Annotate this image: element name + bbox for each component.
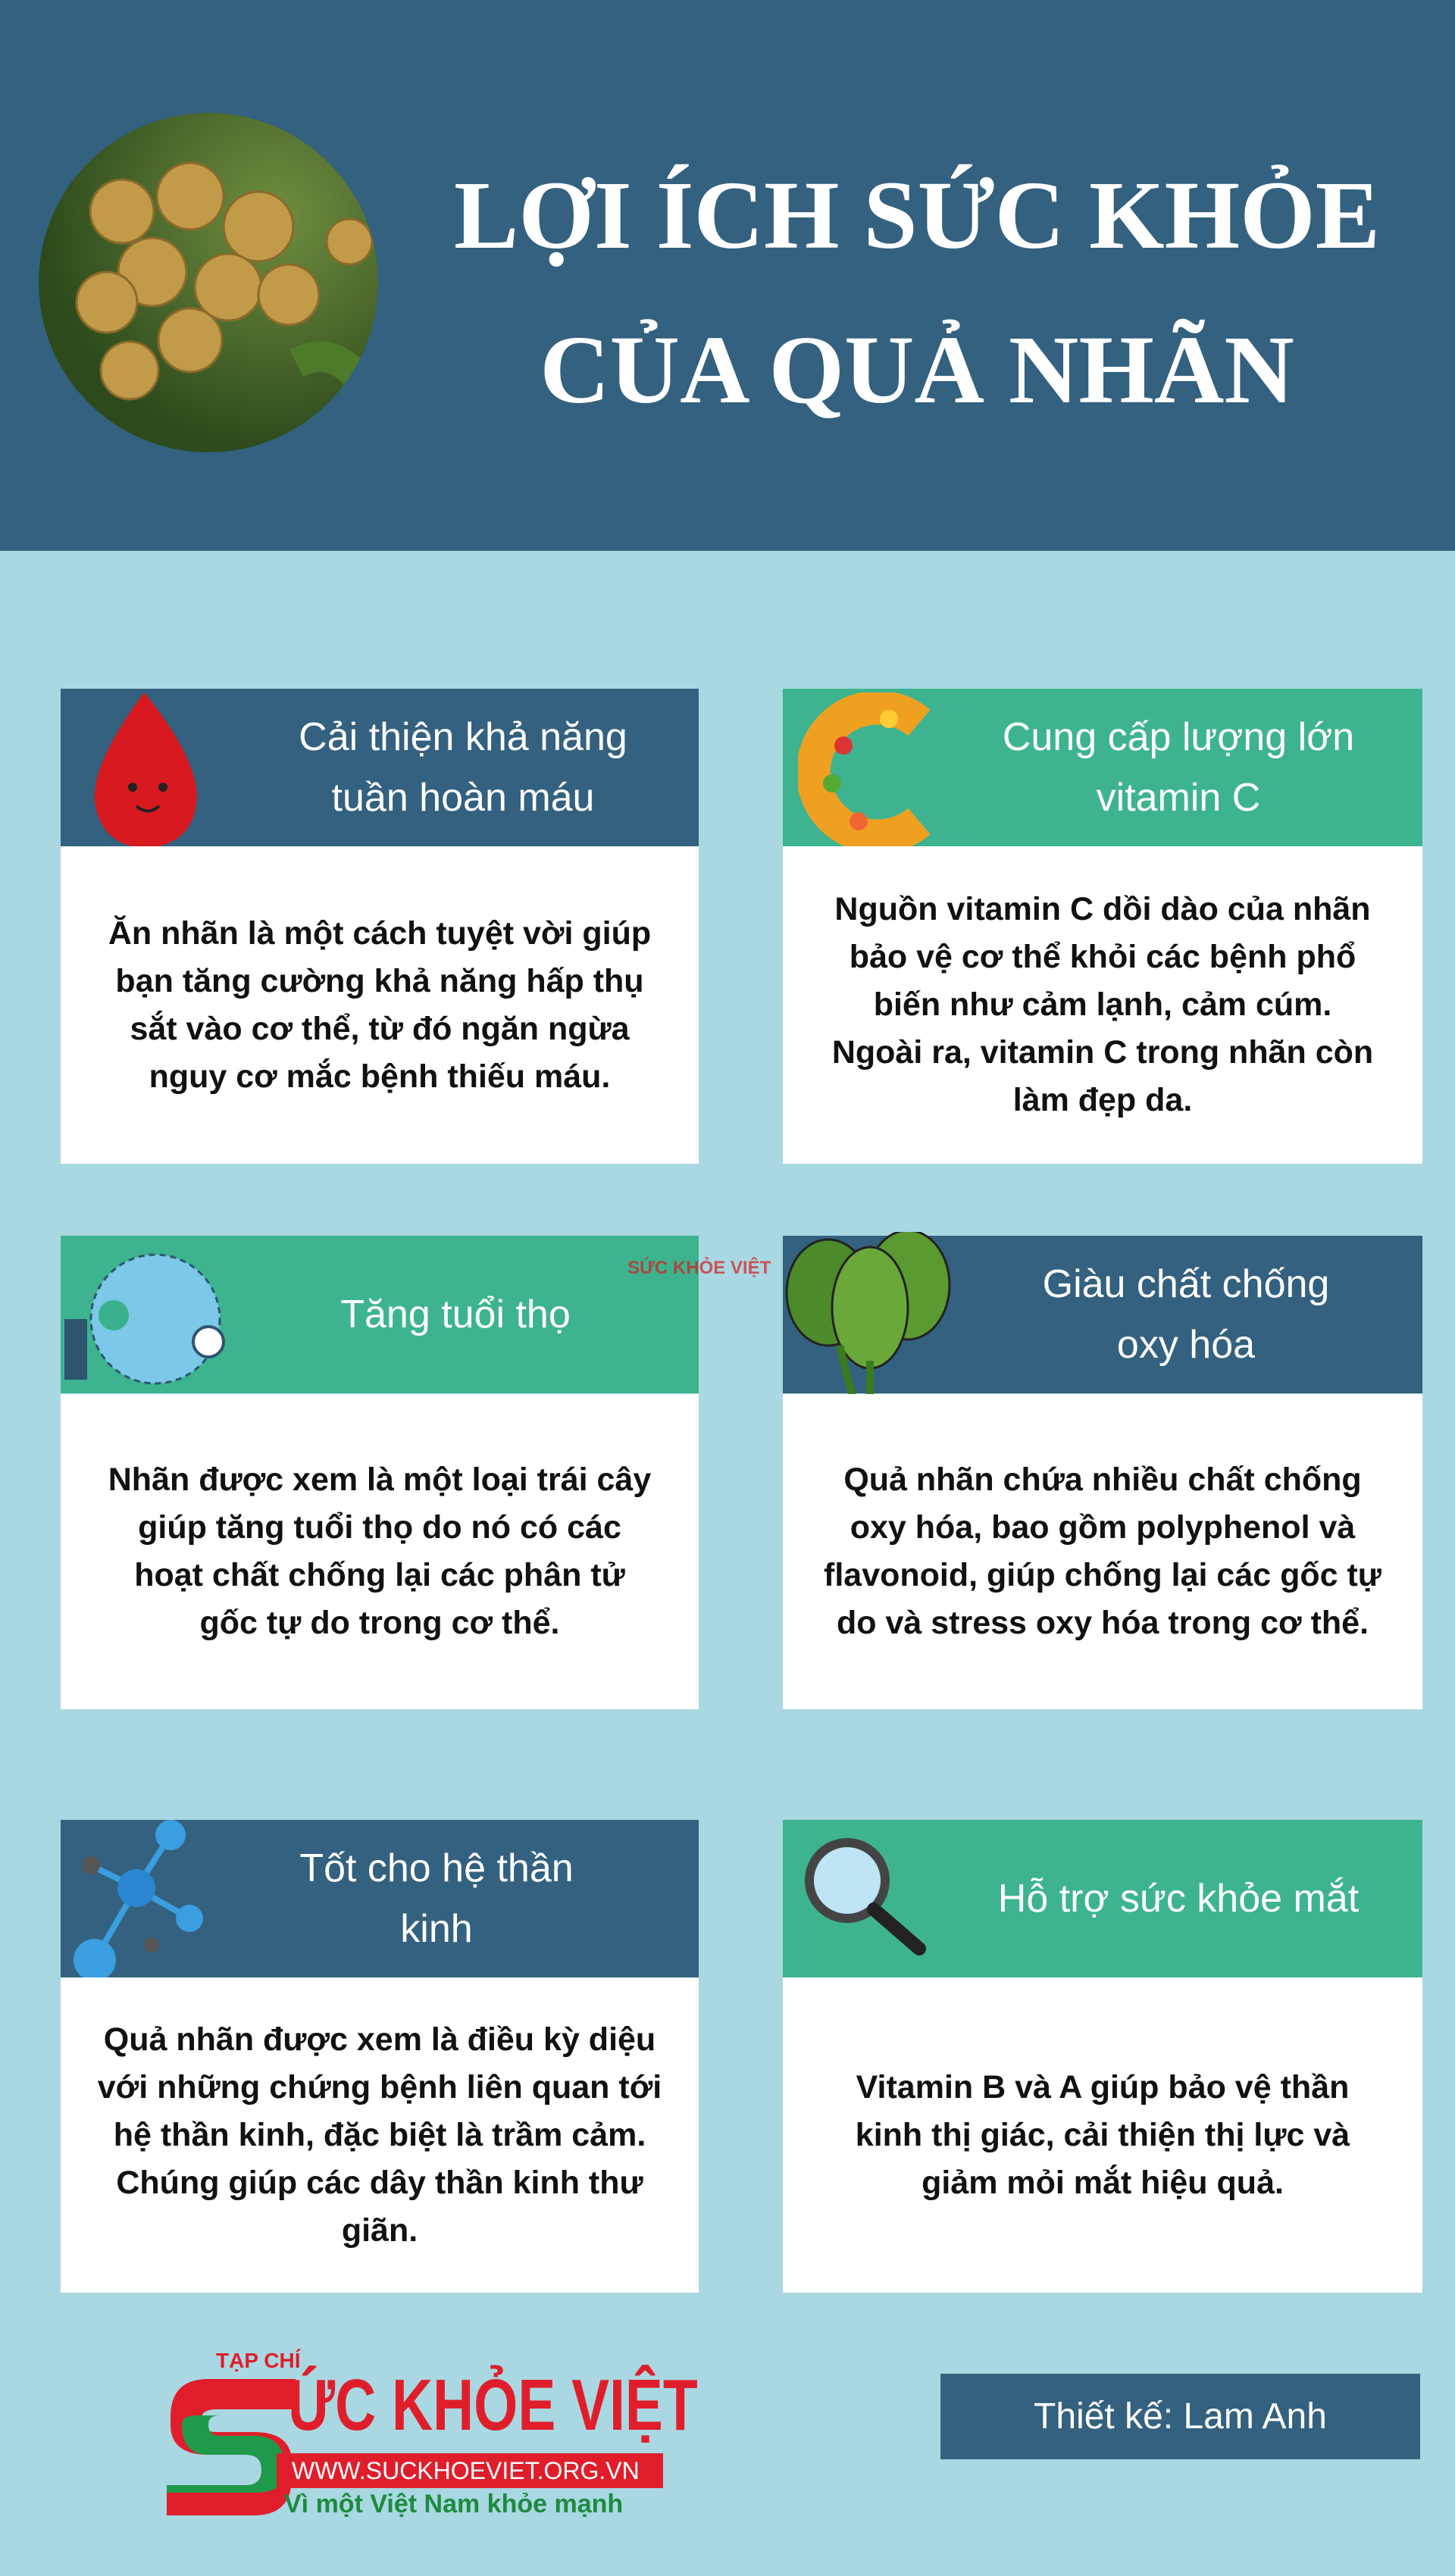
text	[783, 1977, 1422, 2293]
text	[783, 1394, 1422, 1709]
text: Nhãn được xem là một loại trái cây giúp tăng tuổi thọ do nó có các hoạt chất chống lại các phân tử gốc tự do trong cơ thể.	[108, 1462, 651, 1641]
icon: molecule	[74, 1820, 203, 1977]
icon: leaves	[785, 1232, 950, 1394]
text	[61, 1394, 699, 1709]
icon: magnifier	[805, 1838, 926, 1955]
logo: Suc Khoe Viet	[167, 2349, 698, 2518]
heading: Cung cấp lượng lớn	[1003, 715, 1354, 759]
heading	[61, 689, 699, 846]
heading	[61, 1820, 699, 1977]
icon: vitamin C	[798, 692, 931, 846]
heading: Cải thiện khả năng	[299, 715, 627, 759]
watermark logo small: SỨC KHỎE VIỆT	[627, 1258, 771, 1278]
text	[61, 1977, 699, 2293]
title	[454, 161, 1380, 424]
panel: longevity	[61, 1236, 699, 1709]
logo: Suc Khoe Viet: ỨC KHỎE VIỆT	[288, 2365, 698, 2446]
heading	[783, 689, 1422, 846]
text	[783, 846, 1422, 1164]
logo: Suc Khoe Viet: TẠP CHÍ	[216, 2349, 300, 2372]
heading: Tốt cho hệ thần	[299, 1846, 574, 1890]
text: Nguồn vitamin C dồi dào của nhãn bảo vệ cơ thể khỏi các bệnh phổ biến như cảm lạnh, cảm cúm.	[834, 891, 1371, 1023]
text: Vitamin B và A giúp bảo vệ thần kinh thị giác, cải thiện thị lực và giảm mỏi mắt hiệu quả.	[856, 2068, 1350, 2200]
icon: blood drop	[94, 692, 197, 846]
panel: antioxidants	[783, 1232, 1422, 1709]
heading: Hỗ trợ sức khỏe mắt	[998, 1877, 1359, 1921]
text: Quả nhãn chứa nhiều chất chống oxy hóa, bao gồm polyphenol và flavonoid, giúp chống lại các gốc tự do và stress oxy hóa trong cơ thể.	[824, 1462, 1381, 1641]
panel: blood circulation	[61, 689, 699, 1164]
heading: oxy hóa	[1117, 1323, 1255, 1367]
header banner	[0, 0, 1455, 551]
title: CỦA QUẢ NHÃN	[540, 316, 1294, 424]
text	[61, 846, 699, 1164]
heading	[783, 1820, 1422, 1977]
heading: Giàu chất chống	[1043, 1262, 1329, 1306]
longan image circle	[39, 113, 378, 452]
logo: Suc Khoe Viet: WWW.SUCKHOEVIET.ORG.VN	[292, 2457, 640, 2484]
heading: tuần hoàn máu	[332, 776, 594, 820]
heading: kinh	[400, 1907, 473, 1951]
title: LỢI ÍCH SỨC KHỎE	[454, 161, 1380, 269]
heading: Tăng tuổi thọ	[340, 1293, 571, 1336]
text: Ăn nhãn là một cách tuyệt vời giúp bạn tăng cường khả năng hấp thụ sắt vào cơ thể, từ đó ngăn ngừa nguy cơ mắc bệnh thiếu máu.	[108, 915, 651, 1094]
panel: eye health	[783, 1820, 1422, 2293]
heading: vitamin C	[1097, 776, 1260, 820]
heading	[783, 1236, 1422, 1393]
panel: vitamin C	[783, 689, 1422, 1164]
panel: nervous system	[61, 1820, 699, 2293]
heading	[61, 1236, 699, 1393]
text: Ngoài ra, vitamin C trong nhãn còn làm đẹp da.	[832, 1034, 1373, 1118]
text: Quả nhãn được xem là điều kỳ diệu với những chứng bệnh liên quan tới hệ thần kinh, đặc biệt là trầm cảm. Chúng giúp các dây thần kinh thư giãn.	[98, 2021, 662, 2249]
credit box	[940, 2374, 1420, 2459]
credit box: Thiết kế: Lam Anh	[1034, 2396, 1327, 2437]
logo: Suc Khoe Viet: Vì một Việt Nam khỏe mạnh	[284, 2490, 623, 2518]
icon: elderly care	[64, 1253, 225, 1385]
